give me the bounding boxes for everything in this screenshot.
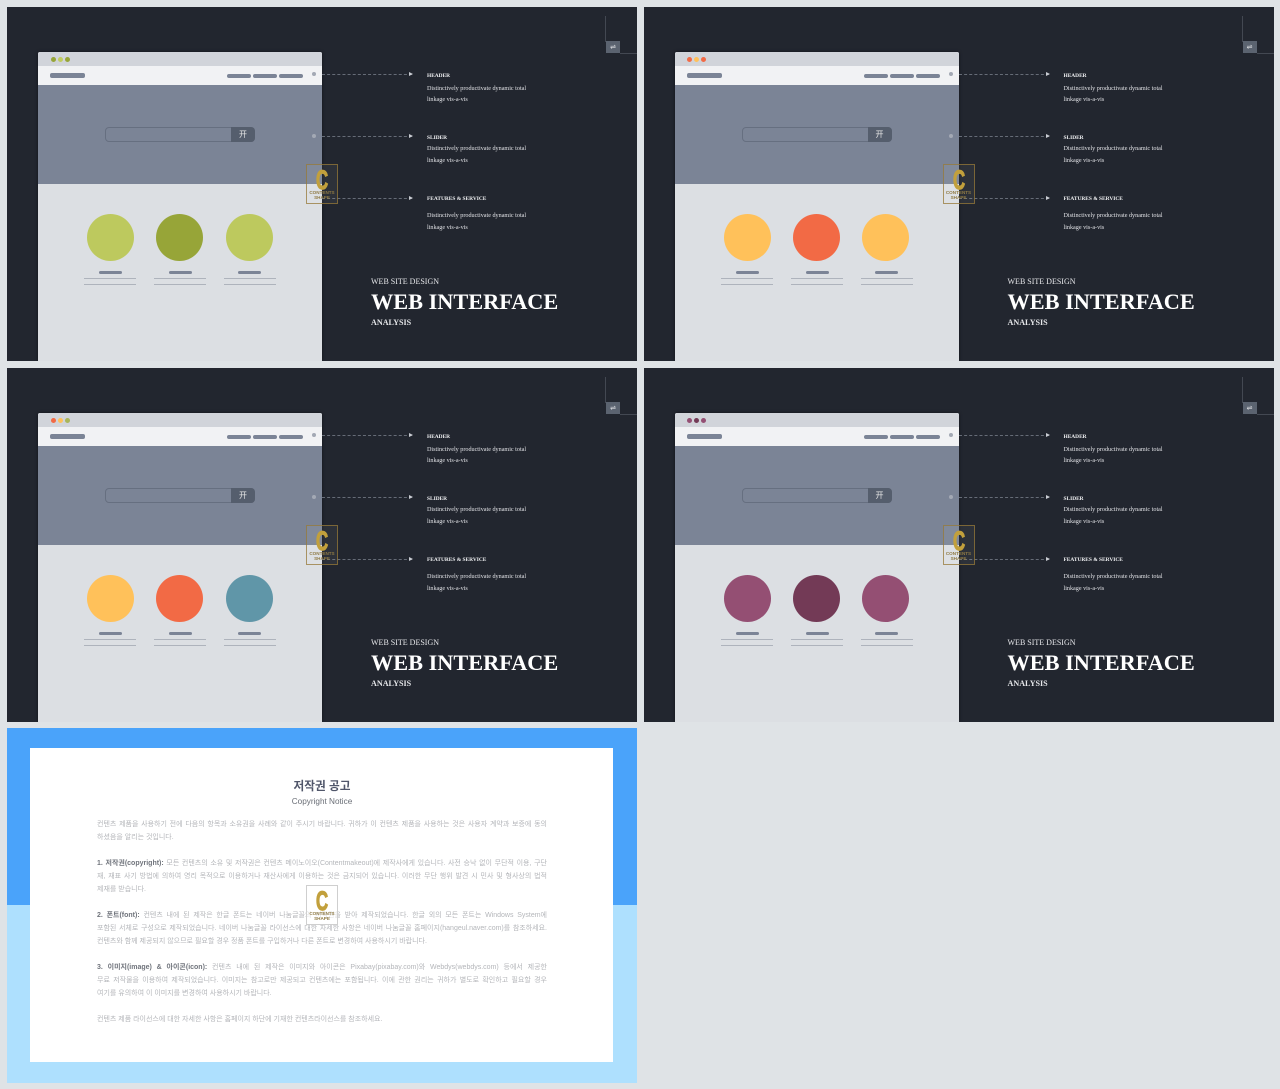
callout: header: linkage vis-a-vis bbox=[427, 97, 468, 103]
callout: slider: linkage vis-a-vis bbox=[427, 158, 468, 164]
callout: features and service: FEATURES & SERVICE bbox=[1064, 557, 1123, 563]
text block: copyright clause: 1. 저작권(copyright): 모든 컨텐츠의 소유 및 저작권은 컨텐츠 메이노이오(Contentmakeout)에 제작사에게 있습니다. 사전 승낙 없이 무단적 이용, 구단 bbox=[97, 860, 547, 867]
watermark logo: SHAPE bbox=[951, 556, 966, 561]
callout: header: linkage vis-a-vis bbox=[427, 458, 468, 464]
title block: WEB INTERFACE bbox=[371, 650, 558, 674]
title block: ANALYSIS bbox=[1008, 679, 1048, 688]
watermark logo: C bbox=[952, 165, 965, 195]
callout: features and service: Distinctively productivate dynamic total bbox=[427, 212, 526, 218]
title block bbox=[371, 638, 558, 688]
text block: font clause bbox=[97, 911, 547, 945]
callout: slider: linkage vis-a-vis bbox=[427, 518, 468, 524]
title block: WEB SITE DESIGN bbox=[1008, 277, 1076, 286]
panel: copyright notice bbox=[7, 728, 637, 1083]
callout: header: linkage vis-a-vis bbox=[1064, 97, 1104, 103]
text block: licence note: 컨텐츠 제품 라이선스에 대한 자세한 사항은 홈페이지 하단에 기재한 컨텐츠라이선스를 참조하세요. bbox=[97, 1016, 382, 1023]
watermark logo bbox=[942, 164, 974, 204]
browser mockup bbox=[674, 413, 958, 722]
text block: font clause: 포함된 서체로 구성으로 제작되었습니다. 네이버 나눔글꼴 라이선스에 대한 자세한 사항은 네이버 나눔글꼴 홈페이지(hangeul.naver.com)를 참조하세요. bbox=[97, 925, 547, 932]
callout: header: HEADER bbox=[1064, 72, 1087, 78]
callout: header: Distinctively productivate dynamic total bbox=[427, 86, 526, 92]
watermark logo bbox=[306, 885, 338, 925]
title block bbox=[1008, 277, 1195, 327]
panel: web interface, orange bbox=[644, 7, 1274, 361]
callout: header: linkage vis-a-vis bbox=[1064, 458, 1104, 464]
text block: image clause bbox=[97, 963, 547, 997]
heading: copyright notice: 저작권 공고 bbox=[293, 780, 350, 793]
corner tag icon: ⇌ bbox=[610, 43, 616, 51]
callout: slider: Distinctively productivate dynamic total bbox=[1064, 507, 1163, 513]
callout: slider: SLIDER bbox=[427, 134, 447, 140]
text block: introduction: 하셨음을 알리는 것입니다. bbox=[97, 834, 174, 841]
text block: introduction bbox=[97, 820, 547, 841]
browser mockup bbox=[674, 52, 958, 361]
corner tag icon: ⇌ bbox=[1247, 404, 1252, 412]
callout: features and service: linkage vis-a-vis bbox=[1064, 224, 1104, 230]
watermark logo: C bbox=[316, 526, 328, 556]
callout: slider bbox=[427, 496, 526, 524]
callout: features and service bbox=[427, 557, 526, 592]
browser mockup: 开 bbox=[876, 490, 884, 501]
callout: header: HEADER bbox=[1064, 434, 1087, 440]
callout: slider bbox=[1064, 496, 1163, 524]
callout: slider: Distinctively productivate dynamic total bbox=[427, 507, 526, 513]
callout: features and service: linkage vis-a-vis bbox=[1064, 586, 1104, 592]
browser mockup: 开 bbox=[876, 129, 884, 140]
corner tag icon: ⇌ bbox=[610, 404, 616, 412]
callout: features and service bbox=[1064, 196, 1163, 230]
browser mockup: 开 bbox=[239, 129, 247, 140]
callout: features and service: Distinctively productivate dynamic total bbox=[1064, 212, 1163, 218]
callout: features and service bbox=[1064, 557, 1163, 592]
callout: slider: SLIDER bbox=[1064, 496, 1084, 502]
callout: slider: SLIDER bbox=[427, 496, 447, 502]
callout: slider: Distinctively productivate dynamic total bbox=[1064, 146, 1163, 152]
title block: WEB SITE DESIGN bbox=[371, 277, 439, 286]
callout: header bbox=[427, 434, 526, 464]
callout: features and service: FEATURES & SERVICE bbox=[427, 196, 486, 202]
callout: header: Distinctively productivate dynamic total bbox=[1064, 86, 1163, 92]
callout: header bbox=[1064, 434, 1163, 464]
title block bbox=[371, 277, 558, 327]
callout: features and service: Distinctively productivate dynamic total bbox=[1064, 574, 1163, 580]
watermark logo: CONTENTS bbox=[309, 551, 335, 556]
callout: header: HEADER bbox=[427, 434, 450, 440]
heading: copyright notice bbox=[292, 780, 352, 806]
watermark logo: C bbox=[316, 886, 328, 916]
watermark logo: CONTENTS bbox=[946, 551, 971, 556]
corner tag icon: ⇌ bbox=[1247, 43, 1252, 51]
title block: WEB INTERFACE bbox=[371, 288, 558, 314]
text block: font clause: 컨텐츠와 함께 제공되지 않으므로 필요할 경우 정품 폰트를 구입하거나 다른 폰트로 변경하여 사용하시기 바랍니다. bbox=[97, 938, 427, 945]
title block: WEB INTERFACE bbox=[1008, 288, 1195, 314]
watermark logo: SHAPE bbox=[951, 195, 966, 200]
callout: features and service: FEATURES & SERVICE bbox=[427, 557, 486, 563]
text block: image clause: 3. 이미지(image) & 아이콘(icon): 컨텐츠 내에 된 제작은 이미지와 아이콘은 Pixabay(pixabay.com)와 Webdys(webdys.com) 등에서 제공한 bbox=[97, 964, 547, 971]
text block: image clause: 여기를 유의하여 이 이미지를 변경하여 사용하시기 바랍니다. bbox=[97, 990, 272, 997]
callout: slider: Distinctively productivate dynamic total bbox=[427, 146, 526, 152]
callout: features and service: Distinctively productivate dynamic total bbox=[427, 574, 526, 580]
text block: copyright clause: 제재를 받습니다. bbox=[97, 886, 146, 893]
watermark logo: SHAPE bbox=[314, 556, 330, 561]
title block: WEB SITE DESIGN bbox=[1008, 638, 1076, 647]
watermark logo: CONTENTS bbox=[946, 190, 971, 195]
callout: header bbox=[1064, 72, 1163, 103]
title block: ANALYSIS bbox=[371, 318, 411, 327]
callout: header: Distinctively productivate dynamic total bbox=[427, 446, 526, 452]
callout: header bbox=[427, 72, 526, 103]
watermark logo: C bbox=[316, 165, 328, 195]
callout: header: Distinctively productivate dynamic total bbox=[1064, 446, 1163, 452]
text block: copyright clause bbox=[97, 859, 547, 893]
text block: introduction: 컨텐츠 제품을 사용하기 전에 다음의 항목과 소유권을 사례와 같이 주시기 바랍니다. 귀하가 이 컨텐츠 제품을 사용하는 것은 사용자 계약과 보증에 동의 bbox=[97, 821, 547, 828]
watermark logo bbox=[942, 525, 974, 565]
callout: slider bbox=[427, 134, 526, 164]
callout: features and service bbox=[427, 196, 526, 230]
callout: slider: linkage vis-a-vis bbox=[1064, 158, 1104, 164]
browser mockup: 开 bbox=[239, 490, 247, 501]
title block: WEB SITE DESIGN bbox=[371, 638, 439, 647]
watermark logo: CONTENTS bbox=[309, 190, 335, 195]
callout: features and service: linkage vis-a-vis bbox=[427, 586, 468, 592]
panel: web interface, plum bbox=[644, 368, 1274, 722]
watermark logo bbox=[306, 525, 338, 565]
title block bbox=[1008, 638, 1195, 688]
text block: font clause: 2. 폰트(font): 컨텐츠 내에 된 제작은 한글 폰트는 네이버 나눔글꼴의 저작권을 받아 제작되었습니다. 한글 외의 모든 폰트는 Windows System에 bbox=[97, 912, 547, 919]
callout: slider: SLIDER bbox=[1064, 134, 1084, 140]
callout: slider bbox=[1064, 134, 1163, 164]
title block: WEB INTERFACE bbox=[1008, 650, 1195, 674]
watermark logo bbox=[306, 164, 338, 204]
browser mockup bbox=[38, 413, 322, 722]
browser mockup bbox=[38, 52, 322, 361]
callout: slider: linkage vis-a-vis bbox=[1064, 518, 1104, 524]
watermark logo: SHAPE bbox=[314, 195, 330, 200]
title block: ANALYSIS bbox=[371, 679, 411, 688]
watermark logo: SHAPE bbox=[314, 916, 330, 921]
panel: web interface, green bbox=[7, 7, 637, 361]
text block: copyright clause: 재, 재표 사기 방법에 의하여 영리 목적으로 이용하거나 재산사에게 이용하는 것은 금지되어 있습니다. 이러한 무단 행위 발견 시 민사 및 형사상의 법적 bbox=[97, 873, 547, 880]
watermark logo: CONTENTS bbox=[309, 911, 335, 916]
panel: web interface, mixed colours bbox=[7, 368, 637, 722]
heading: copyright notice: Copyright Notice bbox=[292, 797, 352, 806]
callout: features and service: linkage vis-a-vis bbox=[427, 224, 468, 230]
text block: image clause: 무료 저작물을 이용하여 제작되었습니다. 이미지는 참고로만 제공되고 컨텐츠에는 포함됩니다. 이에 관한 권리는 귀하가 별도로 확인하고 필요할 경우 bbox=[97, 977, 547, 984]
title block: ANALYSIS bbox=[1008, 318, 1048, 327]
callout: header: HEADER bbox=[427, 72, 450, 78]
callout: features and service: FEATURES & SERVICE bbox=[1064, 196, 1123, 202]
watermark logo: C bbox=[952, 526, 965, 556]
